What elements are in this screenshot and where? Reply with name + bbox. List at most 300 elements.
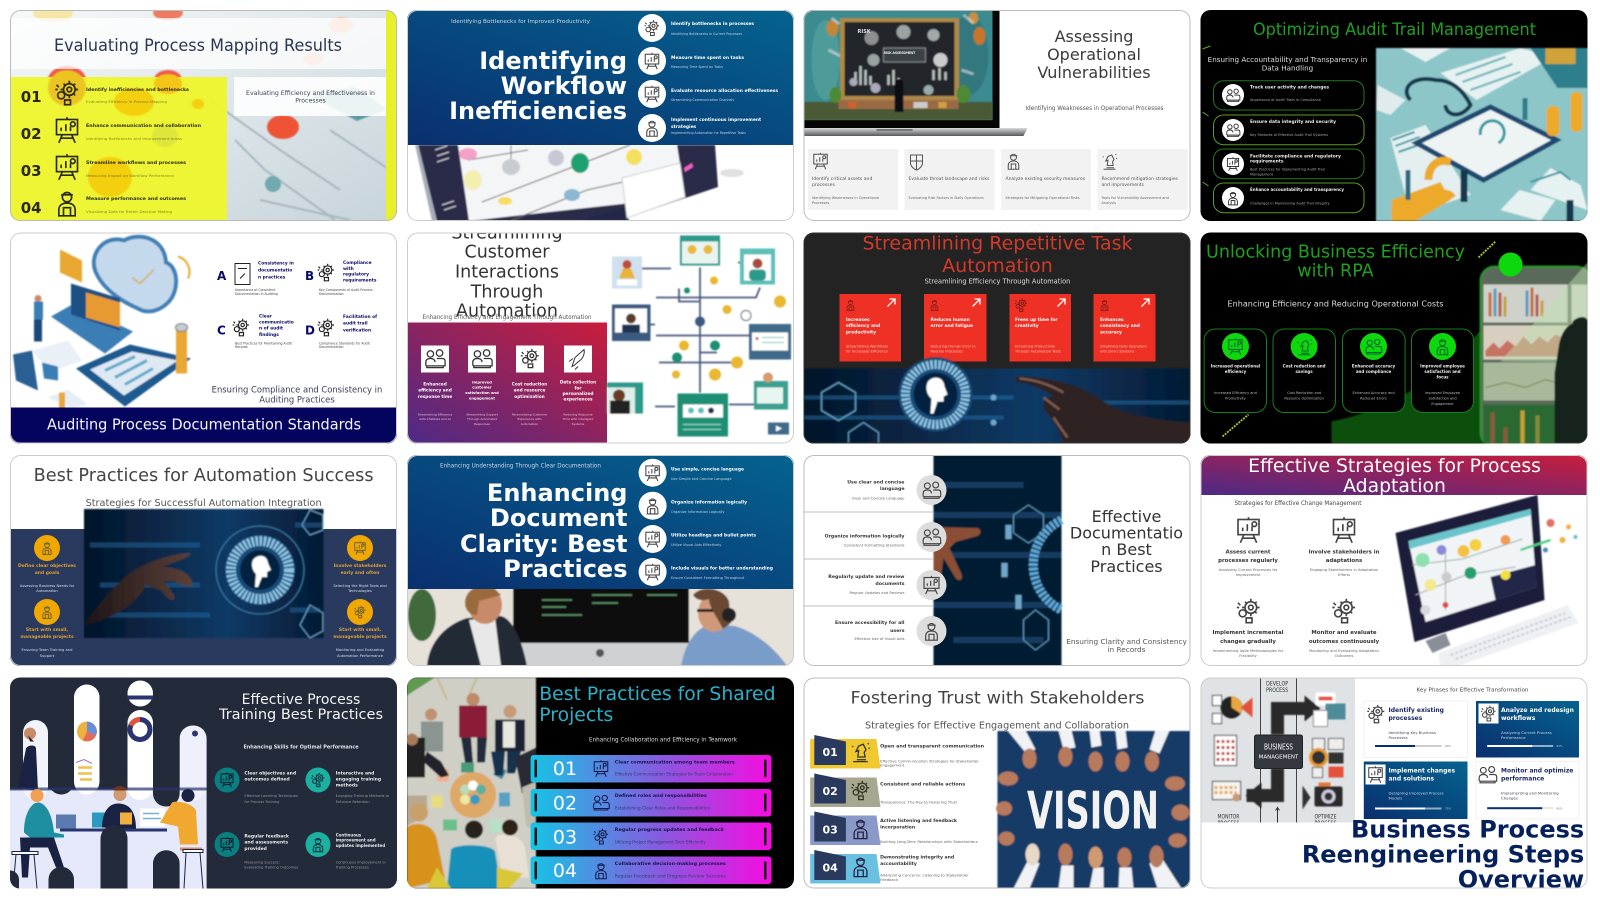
step 04: Demonstrating integrity and <box>880 854 954 860</box>
practice 4: Continuous <box>336 832 362 838</box>
item B <box>305 260 377 296</box>
image: business management roadmap: BUSINESS <box>1264 742 1293 752</box>
icon: easel <box>645 86 659 102</box>
strategy 2: Engaging Stakeholders in Adaptation <box>1310 568 1379 572</box>
strategy 3 <box>333 535 387 593</box>
list item 4: Ensure Consistent Formatting Throughout <box>671 576 745 580</box>
step 03: Active listening and feedback <box>880 818 958 824</box>
panel: streamlining repetitive task automation <box>804 232 1214 450</box>
feature 1: response time <box>418 394 452 400</box>
practice 1: Clear objectives and <box>244 770 296 776</box>
row 1: Track user activity and changes <box>1250 85 1329 91</box>
image: tech interface with hand <box>934 455 1062 666</box>
row 1: language <box>880 486 904 492</box>
card 1: Processes <box>812 201 829 205</box>
subtitle box: Processes <box>295 98 326 104</box>
row 02: 02 <box>21 125 42 143</box>
card 1: efficiency and <box>846 323 880 329</box>
pill 3: Reduced Errors <box>1360 396 1387 400</box>
item B: regulatory <box>343 272 369 278</box>
list item 3 <box>639 525 756 553</box>
card 3: Strategies for Mitigating Operational Risks <box>1006 196 1080 200</box>
item C: communicatio <box>259 320 294 326</box>
yellow side strip <box>386 10 397 221</box>
subtitle: Identifying Weaknesses in Operational Processes <box>1026 106 1164 112</box>
icon: tractor <box>354 606 366 618</box>
title: Interactions <box>455 262 559 282</box>
icon: worker <box>647 121 657 136</box>
practice 4: updates implemented <box>336 843 385 848</box>
practice 2: Enhance Retention <box>336 800 370 804</box>
item C: C <box>217 324 226 338</box>
title: Best Practices for Automation Success <box>34 465 374 486</box>
feature 2: Improved <box>472 380 492 384</box>
list item 2: Measure time spent on tasks <box>671 55 744 61</box>
feature 3: Automation <box>521 422 538 426</box>
list item 2: Organize information logically <box>671 500 747 506</box>
row 02: Enhance communication and collaboration <box>86 123 201 129</box>
feature 3: Personalizing Customer <box>512 412 548 416</box>
icon: crane <box>1298 340 1312 355</box>
image: business management roadmap: MONITOR <box>1218 814 1240 820</box>
panel: streamlining customer interactions <box>407 224 794 444</box>
strategy 1: and goals <box>35 570 60 576</box>
list item 4 <box>638 114 761 142</box>
bar 03: Regular progress updates and feedback <box>615 827 724 833</box>
title band <box>10 18 386 69</box>
strategy 4: manageable projects <box>333 634 387 640</box>
card 4: Simplifying Daily Operations <box>1100 344 1147 348</box>
strategy 4 <box>333 599 387 658</box>
title: Best Practices for Shared <box>539 684 776 705</box>
icon: person <box>596 864 606 879</box>
item A <box>217 260 294 296</box>
item D: audit trail <box>343 320 368 326</box>
list item 1: Identifying Bottlenecks in Current Processes <box>671 32 742 36</box>
item B: with <box>343 266 354 272</box>
strategy 1: processes regularly <box>1218 558 1278 564</box>
row 1 <box>1214 81 1364 110</box>
list item 2 <box>639 492 747 520</box>
card 2: Reduces human <box>930 317 970 323</box>
phase 3: Models <box>1388 796 1402 800</box>
phase 3: 75% <box>1445 806 1451 810</box>
row 2 <box>1214 115 1364 145</box>
title: Operational <box>1047 45 1141 64</box>
row 02 <box>21 117 201 143</box>
practice 2: methods <box>336 782 358 788</box>
subtitle: Key Phases for Effective Transformation <box>1416 688 1528 694</box>
step 04: 04 <box>822 862 838 874</box>
item D: Compliance Standards for Audit <box>319 342 370 346</box>
card 4 <box>1094 294 1156 362</box>
icon: bulb <box>594 829 608 844</box>
panel: best practices for automation success <box>10 455 397 666</box>
phase 2: Performance <box>1501 735 1526 740</box>
subtitle: Strategies for Effective Change Management <box>1234 501 1362 507</box>
icon: chart board <box>56 117 78 143</box>
item B: Compliance <box>343 260 372 266</box>
icon: board <box>924 576 939 594</box>
row 2: Key Features of Effective Audit Trail Systems <box>1250 133 1328 137</box>
feature 4: Systems <box>572 422 585 426</box>
icon: chess <box>1103 154 1117 169</box>
icon: worker <box>1101 300 1108 310</box>
panel: effective documentation best practices <box>804 455 1190 666</box>
subtitle: Auditing Practices <box>259 394 335 404</box>
title: Overview <box>1458 866 1584 894</box>
strategy 1: Assess current <box>1226 550 1271 556</box>
icon: person <box>1229 192 1237 205</box>
card 3: Through Automation Tools <box>1014 350 1061 354</box>
strategy 3: Implementing Agile Methodologies for <box>1213 649 1284 653</box>
icon: bridge <box>1238 517 1259 543</box>
image: two men at monitor <box>407 455 794 666</box>
image: vision with fists <box>996 730 1190 888</box>
strategy 4: Monitoring and Evaluating <box>336 648 384 652</box>
pill 1: Productivity <box>1225 396 1246 400</box>
bar 02: Establishing Clear Roles and Responsibilities <box>615 806 710 810</box>
row 4: Effective Use of Visual Aids <box>854 637 905 641</box>
title bar: Auditing Process Documentation Standards <box>47 416 361 434</box>
image: desktop process map <box>1396 495 1578 666</box>
title: Unlocking Business Efficiency <box>1206 242 1465 262</box>
pill 1: Increased operational <box>1211 364 1261 368</box>
icon: easel <box>646 531 659 547</box>
row 2: Consistent Formatting Standards <box>844 544 905 548</box>
icon: shield <box>910 155 922 170</box>
title: Clarity: Best <box>460 530 628 558</box>
step 01: Open and transparent communication <box>880 744 984 750</box>
feature 4: Data collection <box>560 380 596 386</box>
row 01 <box>21 81 189 106</box>
practice 3: Evaluating Training Outcomes <box>244 866 298 870</box>
icon: gears <box>521 349 539 368</box>
practice 1 <box>214 768 298 804</box>
step 02 <box>810 774 965 807</box>
card 1: Increases <box>846 317 870 323</box>
bar 02: Defined roles and responsibilities <box>615 793 707 799</box>
icon: chess <box>852 743 870 762</box>
card 1: processes <box>812 182 835 188</box>
feature 3: and resource <box>514 388 545 394</box>
image: vision with fists: VISION <box>1027 782 1159 842</box>
step 01: Effective Communication Strategies for Stakeholder <box>880 758 979 764</box>
pill 1 <box>1204 329 1266 412</box>
row 03: Measuring Impact on Workflow Performance <box>86 173 175 178</box>
icon: people <box>594 795 609 810</box>
title: Document <box>490 504 628 532</box>
card 3 <box>1001 149 1091 210</box>
card 1: Streamlining Workflows <box>846 344 888 348</box>
bar 01: 01 <box>553 758 577 780</box>
step 02: Transparency: The Key to Fostering Trust <box>879 800 958 804</box>
phase 2: Analyzing Current Process <box>1501 730 1552 735</box>
strategy 4: Start with small, <box>339 627 381 633</box>
row 04 <box>21 192 186 217</box>
feature 2: Through Automated <box>466 417 497 421</box>
title: Effective <box>1092 507 1161 526</box>
phase 4: 85% <box>1556 806 1563 810</box>
card 4: accuracy <box>1100 330 1122 336</box>
item D: Documentation <box>319 345 344 349</box>
practice 1: for Process Training <box>244 800 279 804</box>
icon: people <box>1479 767 1497 783</box>
feature 3: optimization <box>514 394 545 400</box>
navy band <box>10 529 397 666</box>
subtitle: Ensuring Clarity and Consistency <box>1066 637 1187 646</box>
feature 3: Cost reduction <box>512 382 547 388</box>
row 4: Challenges in Maintaining Audit Trail Integrity <box>1250 202 1330 206</box>
icon: person <box>313 838 323 852</box>
strategy 4: outcomes continuously <box>1309 639 1380 645</box>
icon: truck <box>1229 338 1242 355</box>
strategy 3: Selecting the Right Tools and <box>333 584 387 588</box>
card 4: consistency and <box>1100 323 1140 329</box>
phase 3 <box>1364 762 1468 819</box>
strategy 4 <box>1309 599 1380 658</box>
panel: fostering trust with stakeholders <box>804 678 1190 888</box>
icon: gear bulb <box>1367 705 1384 723</box>
icon: board <box>221 773 233 787</box>
practice 3: Measuring Success: <box>244 860 280 864</box>
pill 3 <box>1342 329 1405 412</box>
title: Evaluating Process Mapping Results <box>54 36 342 55</box>
step 04: Addressing Concerns: Listening to Stakeholder <box>880 872 969 878</box>
strategy 2 <box>1309 517 1380 577</box>
icon: board <box>594 760 608 777</box>
row 3: Facilitate compliance and regulatory <box>1250 154 1341 160</box>
diagram: customer automation network <box>607 236 791 436</box>
feature 4 <box>560 346 596 426</box>
row 4: Enhance accountability and transparency <box>1250 187 1344 193</box>
subtitle: Strategies for Effective Engagement and Collaboration <box>865 720 1129 732</box>
strategy 2: Efforts <box>1338 573 1350 577</box>
card 2 <box>924 294 986 362</box>
feature 3 <box>512 346 548 426</box>
practice 3: Regular feedback <box>244 834 290 840</box>
strategy 2 <box>20 599 74 658</box>
arrow <box>1142 299 1149 306</box>
phase 3: Designing Improved Process <box>1388 790 1444 796</box>
subtitle: in Records <box>1108 645 1146 654</box>
phase 1 <box>1364 701 1468 758</box>
image: business management roadmap: PROCESS <box>1266 687 1288 694</box>
card 4: Analysis <box>1102 201 1116 205</box>
row 01: Evaluating Efficiency in Process Mapping <box>86 99 168 104</box>
card 4: with Smart Solutions <box>1100 350 1134 354</box>
card 1: Identify critical assets and <box>812 176 872 182</box>
card 2 <box>904 149 994 210</box>
phase 1: Identify existing <box>1388 707 1444 714</box>
bar 01 <box>531 755 771 782</box>
strategy 2: adaptations <box>1326 558 1362 564</box>
icon: board <box>1227 157 1239 171</box>
title: Projects <box>539 705 613 726</box>
item A: n practices <box>258 274 286 280</box>
item A: Importance of Consistent <box>235 288 276 292</box>
feature 1 <box>418 346 452 421</box>
icon: worker <box>647 499 658 514</box>
image: business management roadmap: DEVELOP <box>1266 680 1288 688</box>
arrow <box>972 299 980 306</box>
card 2: Evaluate threat landscape and risks <box>908 176 990 182</box>
row 03 <box>21 154 186 180</box>
row 04: Visualizing Data for Better Decision Making <box>86 209 173 214</box>
panel: business process reengineering steps overview <box>1200 678 1588 894</box>
icon: people <box>923 529 941 545</box>
title: Customer <box>464 242 550 262</box>
card 2: error and fatigue <box>930 323 973 329</box>
arrow <box>1058 299 1065 306</box>
strategy 3: changes gradually <box>1220 639 1276 645</box>
icon: monitor shield <box>814 153 827 169</box>
step 04 <box>810 850 969 884</box>
phase 4: Implementing and Monitoring <box>1501 790 1559 796</box>
feature 2: engagement <box>469 396 495 400</box>
row 03: Streamline workflows and processes <box>86 160 186 166</box>
icon: board <box>645 53 659 69</box>
list item 2 <box>638 47 744 75</box>
icon: people <box>473 350 492 368</box>
strategy 2: Support <box>40 654 55 658</box>
title: Reengineering Steps <box>1302 840 1584 868</box>
card 1: Identifying Weaknesses in Operational <box>812 196 879 200</box>
icon: gear bulb <box>1237 599 1260 623</box>
card 2: Reducing Human Error in <box>930 344 976 348</box>
row 3: Management <box>1250 172 1274 176</box>
card 1 <box>840 294 901 362</box>
icon: board <box>1369 766 1382 783</box>
feature 1: Streamlining Efficiency <box>418 412 452 416</box>
feature 1: efficiency and <box>418 388 452 394</box>
image: analyst viewing dashboards <box>1332 262 1590 446</box>
strategy 2: Start with small, <box>26 627 68 633</box>
title: Fostering Trust with Stakeholders <box>850 688 1144 708</box>
icon: gear bulb <box>318 319 334 336</box>
image: business management roadmap <box>1200 678 1355 827</box>
title: with RPA <box>1297 262 1374 282</box>
panel: identifying workflow inefficiencies <box>407 10 794 221</box>
row 2: Ensure data integrity and security <box>1250 119 1336 125</box>
card 1: productivity <box>846 330 876 336</box>
subtitle: Identifying Bottlenecks for Improved Productivity <box>451 19 591 25</box>
step 02: Consistent and reliable actions <box>880 782 965 788</box>
list item 3: Streamlining Communication Channels <box>671 98 734 102</box>
card 3 <box>1010 294 1071 362</box>
strategy 4: Automation Performance <box>337 654 384 658</box>
card 4: Enhances <box>1100 317 1124 323</box>
practice 2 <box>306 768 389 804</box>
feature panel <box>407 322 607 444</box>
subtitle: Enhancing Efficiency and Engagement Through Automation <box>422 314 592 321</box>
item B: B <box>305 269 314 283</box>
icon: gears <box>644 20 659 36</box>
icon: atom <box>1015 298 1027 311</box>
row 02: Identifying Bottlenecks and Improvement Areas <box>86 136 182 141</box>
row 1: Use clear and concise <box>847 480 904 486</box>
pill 4: Engagement <box>1431 402 1454 406</box>
strategy 2: Involve stakeholders in <box>1309 550 1380 556</box>
list item 3: Utilize Visual Aids Effectively <box>671 543 721 547</box>
row 1 <box>847 475 946 505</box>
image: business management roadmap: PROCESS <box>1218 820 1240 827</box>
phase 1: Identifying Key Business <box>1388 730 1436 735</box>
feature 2: Streamlining Support <box>466 412 499 416</box>
panel: evaluating process mapping results <box>10 4 397 221</box>
image: isometric audit documents <box>1376 48 1588 221</box>
strategy 4: Monitor and evaluate <box>1311 630 1377 636</box>
step 01: 01 <box>822 746 838 759</box>
icon: bridge <box>355 542 365 554</box>
row 4: Ensure accessibility for all <box>835 620 905 626</box>
strategy 2: Ensuring Team Training and <box>22 648 72 652</box>
image: process map background <box>33 4 390 220</box>
item B: Key Components of Audit Process <box>319 288 373 292</box>
icon: strategy board <box>56 154 78 180</box>
card 3: creativity <box>1015 323 1039 329</box>
list item 2: Measuring Time Spent on Tasks <box>671 65 723 69</box>
card 2: Routine Processes <box>930 350 963 354</box>
title: Automation <box>942 255 1053 277</box>
image: laptop with risk assessment board: RISK <box>858 29 872 35</box>
pill 3: Enhanced Accuracy and <box>1352 391 1395 395</box>
row 01: 01 <box>21 88 42 106</box>
icon: people <box>923 482 941 498</box>
title: Vulnerabilities <box>1037 63 1151 82</box>
step 02: 02 <box>822 785 838 798</box>
panel: effective strategies for process adaptation <box>1200 455 1588 666</box>
image: dashboard laptop <box>415 145 744 221</box>
step 03: incorporation <box>880 824 915 830</box>
feature 4: Reducing Response <box>563 412 593 416</box>
pill 2: Resource Optimization <box>1284 396 1324 400</box>
strategy 1: Improvement <box>1236 573 1261 577</box>
title: n Best <box>1101 540 1152 559</box>
strategy 1: Automation <box>36 589 58 593</box>
feature 2 <box>465 346 499 426</box>
pill 4 <box>1412 329 1474 412</box>
feature 1: Enhanced <box>423 382 447 388</box>
phase 4: performance <box>1501 776 1544 782</box>
title: Identifying <box>479 47 627 75</box>
row 3: Regular Updates and Reviews <box>850 591 905 595</box>
row 3: Best Practices for Implementing Audit Trail <box>1250 168 1325 172</box>
pill 4: Improved Employee <box>1425 391 1460 395</box>
practice 4: improvement and <box>336 838 376 842</box>
feature 1: with Chatbots and AI <box>419 417 451 421</box>
image: business management roadmap: PROCESS <box>1314 820 1337 827</box>
item C: Best Practices for Maintaining Audit <box>235 342 293 346</box>
row 4 <box>1214 183 1364 213</box>
item A: A <box>217 269 227 283</box>
icon: rocket <box>569 350 584 370</box>
pill 4: focus <box>1436 374 1449 380</box>
item C: Records <box>235 345 248 349</box>
row 04: 04 <box>21 199 42 217</box>
subtitle: Strategies for Successful Automation Integration <box>86 498 322 509</box>
row 04: Measure performance and outcomes <box>86 196 186 202</box>
list item 1: Identify bottlenecks in processes <box>671 21 754 27</box>
list item 3 <box>638 80 778 108</box>
step 03: 03 <box>822 824 838 836</box>
pill 2 <box>1273 329 1336 412</box>
practice 3: provided <box>244 846 267 852</box>
icon: worker <box>59 192 75 216</box>
row 01: Identify inefficiencies and bottlenecks <box>86 87 189 93</box>
subtitle: Enhancing Collaboration and Efficiency in Teamwork <box>589 738 738 744</box>
card 3: Enhancing Productivity <box>1015 344 1055 348</box>
